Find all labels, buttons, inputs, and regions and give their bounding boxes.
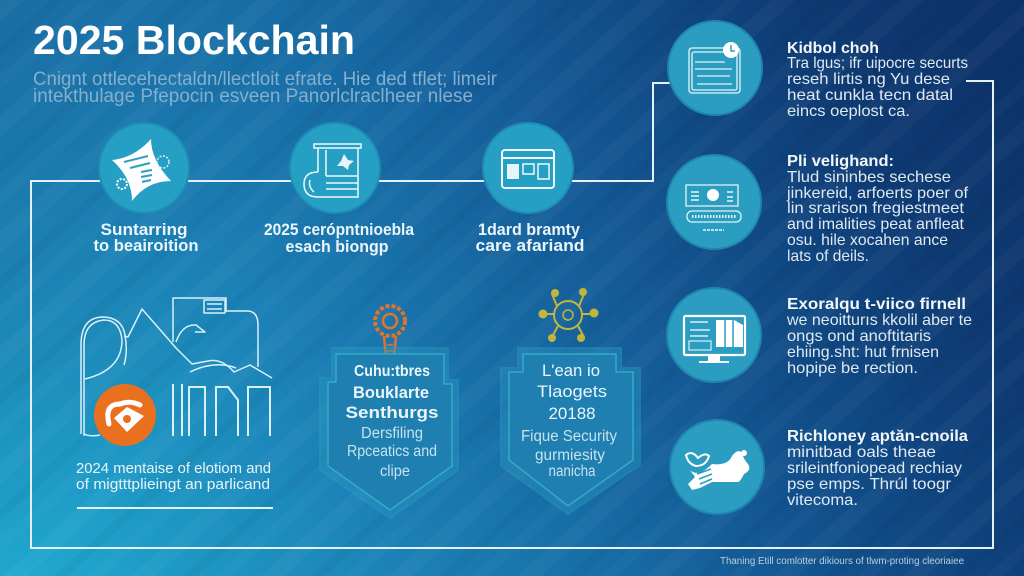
panel: shield right [501, 348, 640, 514]
row 1 text: Tra lgus; ifr uipocre securts [787, 55, 968, 72]
icon: monitor [684, 316, 745, 363]
right row 4: icon and text [670, 420, 968, 514]
row 2 text: jinkereid, arfoerts poer of [786, 185, 969, 202]
left panel: sketch illustration [76, 298, 272, 493]
row 3 text: ongs ond anoftitaris [787, 328, 931, 345]
icon: device panel [686, 185, 741, 230]
row 1 text: reseh lirtis ng Yu dese [787, 71, 950, 88]
shield left text: Rpceatics and [347, 443, 437, 460]
shield left text: Dersfiling [361, 425, 423, 442]
row 3 text: hopipe be rection. [787, 360, 918, 377]
title: 2025 Blockchain [33, 17, 355, 63]
shield right text: gurmiesity [535, 447, 605, 464]
row 1 text [787, 40, 968, 120]
row 2 text [786, 153, 969, 265]
right row 2: icon and text [667, 153, 969, 265]
row 4 text [787, 428, 968, 509]
left panel caption: 2024 mentaise of elotiom and [76, 461, 271, 477]
row 3 text [786, 296, 972, 377]
row 2 text: lin srarison fregiestmeet [787, 200, 965, 217]
icon: browser window [502, 150, 554, 188]
subtitle: intekthulage Pfepocin esveen Panorlclraclheer nlese [33, 86, 473, 107]
step 2: circle icon and label [264, 123, 415, 256]
shield right text: Fique Security [521, 428, 617, 445]
house outline sketch [81, 298, 272, 436]
step 3 label [476, 221, 584, 255]
row 3 text: ehiing.sht: hut frnisen [787, 344, 939, 361]
columns [173, 384, 270, 436]
row 4 text: Richloney aptăn-cnoila [787, 428, 968, 445]
row 4 text: minitbad oals theae [787, 444, 936, 461]
panel: shield left [320, 348, 458, 518]
row 3 text: Exoralqu t-viico firnell [787, 296, 966, 313]
icon: yellow network [538, 288, 598, 342]
right row 3: icon and text [667, 288, 972, 382]
connector frame [31, 81, 993, 548]
row 2 text: Pli velighand: [787, 153, 894, 170]
step 1 label: to beairoition [94, 236, 198, 255]
shield left text: Cuhu:tbres [354, 363, 430, 380]
shield left text: clipe [380, 463, 410, 480]
row 3 text: we neoitturıs kkolil aber te [786, 312, 972, 329]
right row 1: icon and text [668, 21, 968, 120]
row 1 text: heat cunkla tecn datal [787, 87, 953, 104]
row 4 text: pse emps. Thrúl toogr [787, 476, 952, 493]
shield right text: 20188 [548, 404, 596, 423]
icon: orange key bulb [375, 306, 405, 358]
step 2 label [264, 221, 415, 256]
shield right text: nanicha [548, 463, 596, 480]
left panel caption [76, 461, 271, 493]
step 3 label: 1dard bramty [478, 221, 581, 239]
step 2 label: esach biongp [286, 238, 388, 256]
subtitle [33, 69, 498, 107]
icon: document with clock [689, 42, 740, 93]
step 1 label: Suntarring [100, 220, 188, 239]
shield right text: Tlaogets [537, 382, 607, 401]
step 2 label: 2025 cerópntnioebla [264, 221, 415, 239]
row 1 text: eincs oeplost ca. [787, 103, 910, 120]
shield right text: L'ean io [542, 361, 600, 380]
left panel caption: of migtttplieingt an parlicand [76, 477, 270, 493]
icon: star document [112, 139, 171, 201]
row 1 text: Kidbol choh [787, 40, 879, 57]
step 1: circle icon and label [94, 123, 198, 255]
row 2 text: osu. hile xocahen ance [787, 232, 948, 249]
shield left text: Bouklarte [353, 383, 429, 402]
row 4 text: srileintfoniopead rechiay [787, 460, 962, 477]
row 2 text: Tlud sininbes sechese [787, 169, 951, 186]
shield right text [521, 361, 617, 480]
subtitle: Cnignt ottlecehectaldn/llectloit efrate. Hie ded tflet; limeir [33, 69, 498, 90]
icon: book and window [304, 144, 361, 197]
shield left text [346, 363, 438, 480]
row 2 text: lats of deils. [787, 248, 869, 265]
shield left text: Senthurgs [346, 403, 438, 422]
step 3: circle icon and label [476, 123, 584, 255]
row 4 text: vitecoma. [787, 492, 858, 509]
row 2 text: and imalities peat anfleat [787, 216, 965, 233]
icon: hand [686, 450, 749, 490]
step 3 label: care afariand [476, 237, 584, 255]
icon: orange badge [94, 384, 156, 446]
step 1 label [94, 220, 198, 255]
footer note: Thaning Etill comlotter dikiours of tlwm-proting cleoriaiee [720, 556, 964, 567]
